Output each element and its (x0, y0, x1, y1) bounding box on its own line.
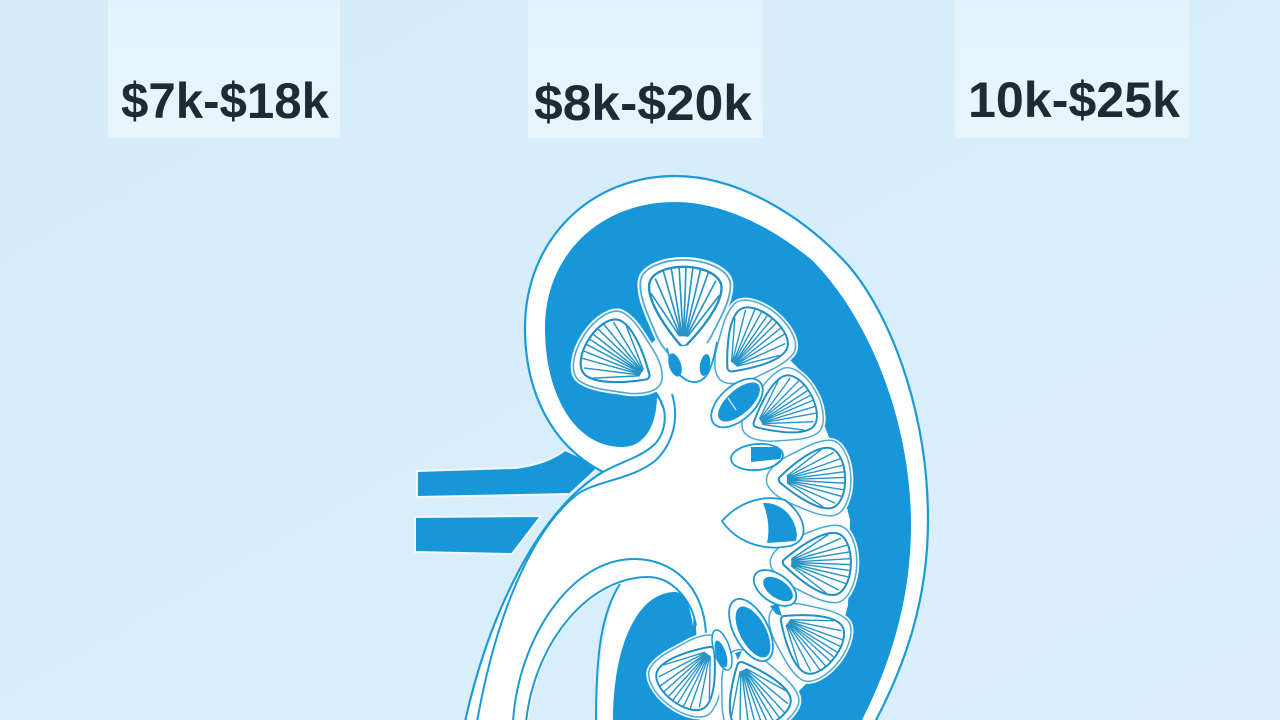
ureter gap (528, 584, 620, 720)
price card: $7k-$18k: $7k-$18k (121, 73, 329, 129)
price card: $7k-$18k (108, 0, 340, 138)
ureter and pelvis outlines (465, 394, 706, 720)
renal sinus (465, 305, 850, 720)
price card: $8k-$20k: $8k-$20k (534, 75, 752, 131)
kidney capsule (465, 176, 928, 720)
cortex (545, 202, 911, 720)
price card: $8k-$20k (528, 0, 763, 138)
renal pyramids (562, 258, 862, 720)
minor calyces (666, 342, 804, 672)
renal vessels (415, 450, 600, 554)
price card: 10k-$25k: 10k-$25k (968, 72, 1180, 128)
price card: 10k-$25k (955, 0, 1189, 138)
kidney illustration (415, 176, 928, 720)
